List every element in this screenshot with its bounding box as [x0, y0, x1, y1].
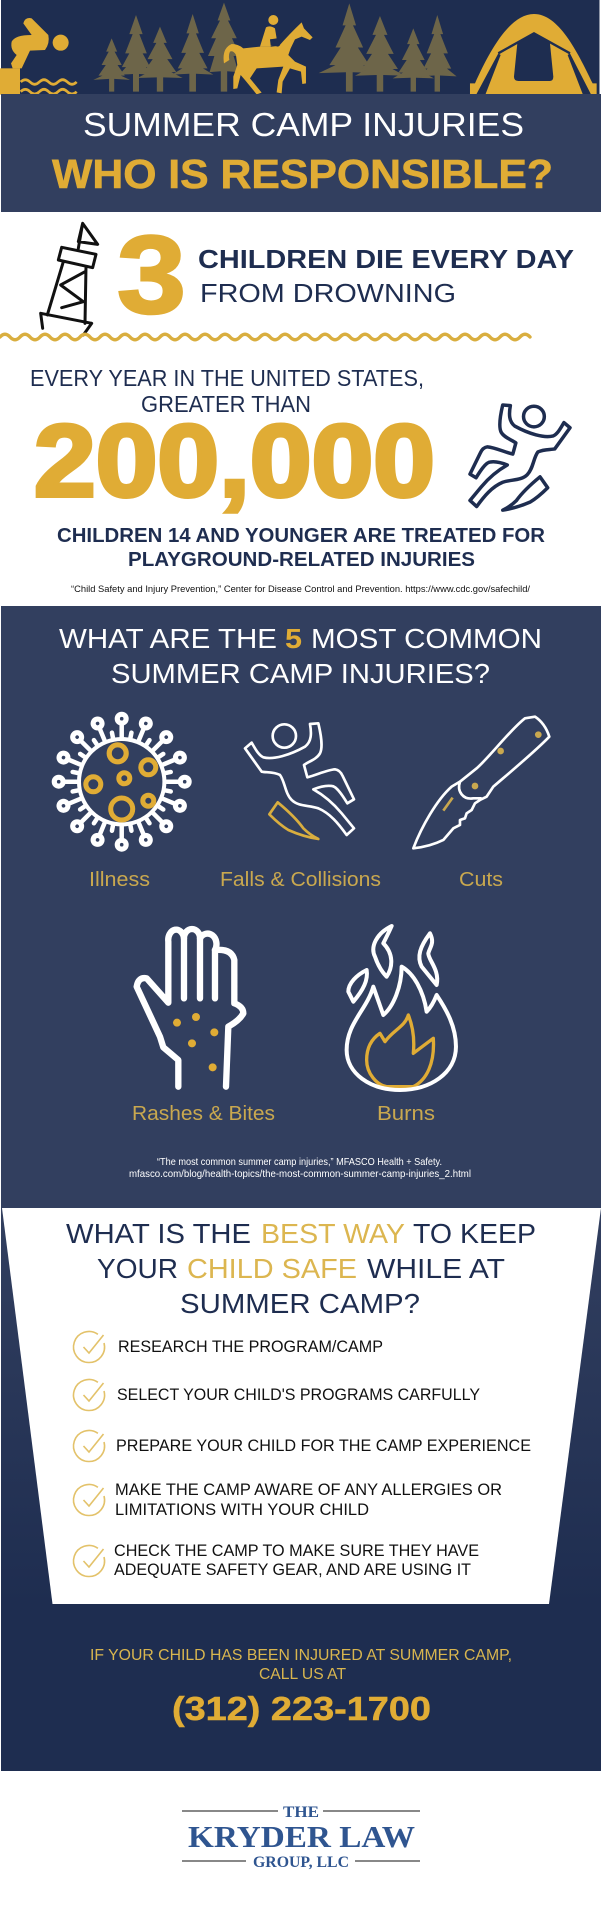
panel: title band: [1, 94, 601, 212]
icon: falling person navy: [470, 405, 570, 510]
text: call us at: CALL US AT: [259, 1666, 346, 1683]
heading: best way to keep child safe: WHILE AT: [367, 1253, 505, 1284]
panel: drowning statistic: [0, 214, 574, 340]
heading: five most common injuries: [59, 623, 542, 689]
citation: mfasco: “The most common summer camp injuries,” MFASCO Health + Safety.: [157, 1156, 442, 1168]
label: burns: Burns: [377, 1103, 435, 1125]
checklist item: safety gear: CHECK THE CAMP TO MAKE SURE THEY HAVE: [114, 1541, 479, 1560]
phone number: (312) 223-1700: [172, 1690, 431, 1727]
big number 3: 3: [117, 214, 186, 337]
big number 200,000: 200,000: [34, 404, 435, 518]
title: summer camp injuries: SUMMER CAMP INJURIES: [83, 106, 524, 143]
checklist item: research: RESEARCH THE PROGRAM/CAMP: [118, 1337, 383, 1356]
icon: burns flame: [347, 926, 456, 1090]
logo: the kryder law group: THE: [283, 1804, 319, 1821]
checklist item: safety gear: ADEQUATE SAFETY GEAR, AND ARE USING IT: [114, 1560, 471, 1579]
title: who is responsible: WHO IS RESPONSIBLE?: [52, 151, 553, 197]
wave divider: [0, 334, 530, 340]
heading: best way to keep child safe: SUMMER CAMP?: [180, 1288, 420, 1319]
panel: call to action: [1, 1604, 601, 1771]
checklist item: select programs: SELECT YOUR CHILD'S PROGRAMS CARFULLY: [117, 1385, 480, 1404]
label: falls and collisions: Falls & Collisions: [220, 869, 381, 891]
icon: diving swimmer: [0, 18, 77, 95]
panel: top banner scene: [0, 0, 600, 96]
icon: horse and rider: [224, 15, 313, 94]
checklist item: allergies: [74, 1480, 502, 1519]
icon: camping tent: [470, 14, 597, 96]
text: greater than: GREATER THAN: [141, 391, 311, 417]
text: children die every day: CHILDREN DIE EVERY DAY: [198, 244, 574, 274]
checklist item: allergies: LIMITATIONS WITH YOUR CHILD: [115, 1500, 369, 1519]
heading: best way to keep child safe: [66, 1218, 536, 1319]
heading: five most common injuries: WHAT ARE THE: [59, 623, 277, 654]
label: illness: Illness: [89, 869, 150, 891]
heading: five most common injuries: MOST COMMON: [311, 623, 542, 654]
panel: keeping your child safe: [1, 1208, 601, 1604]
heading: best way to keep child safe: YOUR: [97, 1253, 178, 1284]
label: rashes and bites: Rashes & Bites: [132, 1103, 275, 1125]
text: playground related injuries: PLAYGROUND-RELATED INJURIES: [128, 549, 475, 571]
icon: pine trees: [93, 3, 457, 92]
icon: illness virus: [52, 712, 192, 852]
checklist item: prepare child: PREPARE YOUR CHILD FOR THE CAMP EXPERIENCE: [116, 1436, 531, 1455]
citation: cdc: “Child Safety and Injury Prevention,” Center for Disease Control and Prevention. https://www.cdc.gov/safechild/: [71, 584, 530, 595]
heading: five most common injuries: SUMMER CAMP INJURIES?: [111, 658, 490, 689]
text: children 14 and younger: CHILDREN 14 AND YOUNGER ARE TREATED FOR: [57, 525, 546, 547]
icon: buoy tower: [41, 223, 98, 335]
citation: mfasco: mfasco.com/blog/health-topics/the-most-common-summer-camp-injuries_2.html: [129, 1168, 471, 1180]
checklist item: select programs: [74, 1380, 480, 1411]
icon: falls and collisions: [245, 723, 354, 839]
heading: best way to keep child safe: WHAT IS THE: [66, 1218, 251, 1249]
label: cuts: Cuts: [459, 869, 503, 891]
heading: best way to keep child safe: CHILD SAFE: [187, 1253, 357, 1284]
text: every year in the united states: EVERY YEAR IN THE UNITED STATES,: [30, 365, 424, 391]
icon: cuts knife: [413, 717, 549, 848]
panel: five most common injuries: [1, 606, 601, 1208]
illness gold rings: [86, 745, 156, 820]
heading: best way to keep child safe: BEST WAY: [261, 1218, 405, 1249]
icon: rashes and bites hand: [137, 929, 243, 1087]
checklist item: allergies: MAKE THE CAMP AWARE OF ANY ALLERGIES OR: [115, 1480, 502, 1499]
logo: the kryder law group: [182, 1804, 420, 1871]
logo: the kryder law group: GROUP, LLC: [253, 1854, 349, 1871]
checklist item: prepare child: [74, 1431, 531, 1462]
text: if your child has been injured: IF YOUR CHILD HAS BEEN INJURED AT SUMMER CAMP,: [90, 1647, 512, 1664]
checklist item: research: [74, 1332, 383, 1363]
text: from drowning: FROM DROWNING: [200, 278, 456, 308]
heading: best way to keep child safe: TO KEEP: [413, 1218, 536, 1249]
logo: the kryder law group: KRYDER LAW: [188, 1819, 415, 1854]
citation: mfasco: [129, 1156, 471, 1180]
panel: playground statistic: [30, 365, 570, 595]
checklist item: safety gear: [74, 1541, 479, 1579]
heading: five most common injuries: 5: [285, 623, 302, 654]
